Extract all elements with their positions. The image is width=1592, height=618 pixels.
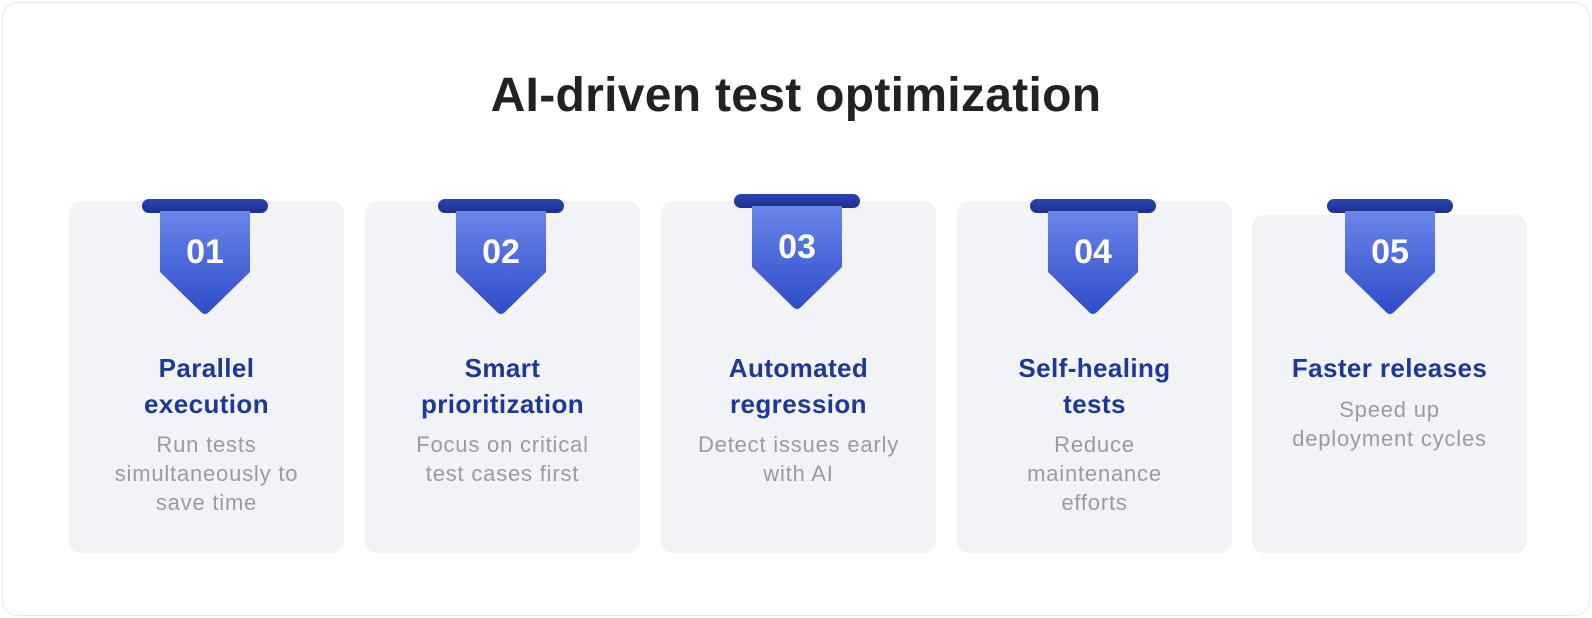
heading: smart prioritization: Smart [465, 353, 540, 383]
panel: card 4 [957, 201, 1232, 553]
text: card 1 description: simultaneously to [115, 461, 298, 486]
heading: automated regression: regression [730, 389, 867, 419]
text: card 3 description: Detect issues early [698, 432, 899, 457]
heading: smart prioritization [421, 353, 584, 419]
panel: card 2 [365, 201, 640, 553]
heading: self-healing tests: tests [1063, 389, 1126, 419]
heading: automated regression [729, 353, 868, 419]
text: card 2 description: test cases first [426, 461, 579, 486]
text: card 4 description [1027, 432, 1162, 515]
text: card 4 description: Reduce [1054, 432, 1135, 457]
text: card 5 description: deployment cycles [1292, 426, 1487, 451]
icon: ribbon 02: 02 [482, 233, 520, 271]
text: card 1 description [115, 432, 298, 515]
text: card 3 description: with AI [763, 461, 834, 486]
text: card 1 description: Run tests [156, 432, 257, 457]
icon: ribbon 04 [1030, 199, 1156, 314]
panel: card 1 [69, 201, 344, 553]
text: card 2 description [416, 432, 589, 486]
text: card 2 description: Focus on critical [416, 432, 589, 457]
heading: faster releases: Faster releases [1292, 353, 1487, 383]
icon: ribbon 03: 03 [778, 228, 816, 266]
title: AI-driven test optimization [491, 69, 1101, 122]
text: card 5 description [1292, 397, 1487, 451]
text: card 3 description [698, 432, 899, 486]
heading: self-healing tests: Self-healing [1018, 353, 1171, 383]
heading: smart prioritization: prioritization [421, 389, 584, 419]
heading: parallel execution: execution [144, 389, 269, 419]
icon: ribbon 05 [1327, 199, 1453, 314]
panel: card 3 [661, 201, 936, 553]
heading: self-healing tests [1018, 353, 1171, 419]
text: card 4 description: efforts [1061, 490, 1128, 515]
icon: ribbon 01: 01 [186, 233, 224, 271]
icon: ribbon 01 [142, 199, 268, 314]
heading: parallel execution [144, 353, 269, 419]
heading: automated regression: Automated [729, 353, 868, 383]
icon: ribbon 04: 04 [1074, 233, 1112, 271]
icon: ribbon 03 [734, 194, 860, 309]
icon: ribbon 02 [438, 199, 564, 314]
icon: ribbon 05: 05 [1371, 233, 1409, 271]
panel: card 5 [1252, 215, 1527, 553]
text: card 5 description: Speed up [1339, 397, 1440, 422]
heading: parallel execution: Parallel [159, 353, 254, 383]
text: card 4 description: maintenance [1027, 461, 1162, 486]
text: card 1 description: save time [156, 490, 257, 515]
